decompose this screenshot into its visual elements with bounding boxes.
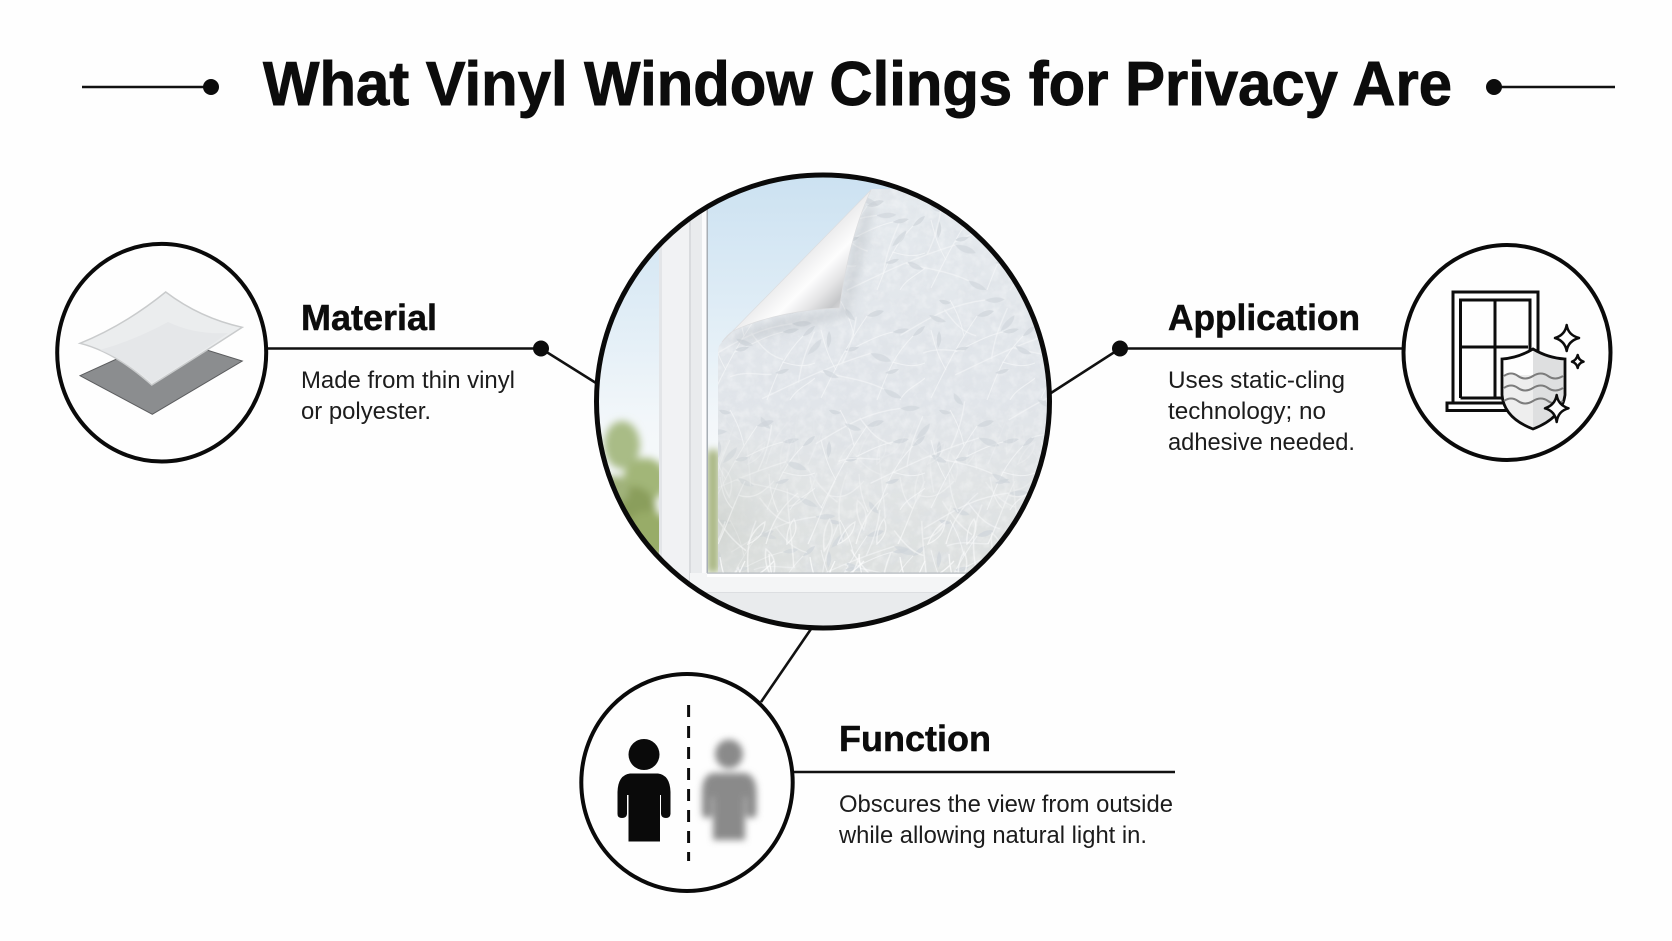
central photo: window with peeling privacy film xyxy=(590,170,1060,633)
function heading: Function xyxy=(839,718,991,759)
connector: application to centre xyxy=(1051,340,1403,393)
privacy film with leaf pattern xyxy=(710,185,1060,575)
icon: clear person xyxy=(618,739,670,842)
sparkles xyxy=(1545,325,1584,422)
material description: Made from thin vinyl xyxy=(301,367,515,394)
function description: while allowing natural light in. xyxy=(838,822,1147,849)
title text: What Vinyl Window Clings for Privacy Are xyxy=(263,50,1452,119)
connector: function to text xyxy=(794,771,1175,773)
material heading: Material xyxy=(301,297,437,338)
function icon circle xyxy=(581,674,793,891)
application icon circle xyxy=(1404,245,1610,460)
left title rule xyxy=(82,79,219,95)
icon: window with shield and sparkles xyxy=(1447,292,1584,429)
material description xyxy=(301,367,515,425)
window xyxy=(1447,292,1538,410)
peeled corner xyxy=(722,190,871,342)
icon: layered film sheets xyxy=(80,292,242,414)
function description: Obscures the view from outside xyxy=(839,791,1173,818)
shield xyxy=(1502,349,1565,429)
panel: material xyxy=(57,244,515,462)
title with flanking rules xyxy=(82,50,1615,119)
window sill xyxy=(690,572,968,626)
central circle outline xyxy=(596,175,1050,628)
right title rule xyxy=(1486,79,1615,95)
panel: function xyxy=(581,674,1173,891)
icon: blurred person xyxy=(702,740,756,840)
flap shadow xyxy=(735,205,870,340)
panel: application xyxy=(1168,245,1610,460)
material icon circle xyxy=(57,244,266,462)
trees outside xyxy=(601,421,719,573)
application description xyxy=(1168,367,1355,456)
application description: adhesive needed. xyxy=(1168,429,1355,456)
connector: function to centre xyxy=(761,629,811,702)
application description: Uses static-cling xyxy=(1168,367,1345,394)
application heading: Application xyxy=(1168,297,1360,338)
outside sky xyxy=(599,178,894,458)
function description xyxy=(838,791,1173,849)
application description: technology; no xyxy=(1168,398,1326,425)
connector: material to centre xyxy=(267,340,596,383)
window frame vertical xyxy=(659,209,708,582)
icon: divider dashed line xyxy=(687,705,690,861)
material description: or polyester. xyxy=(301,398,431,425)
